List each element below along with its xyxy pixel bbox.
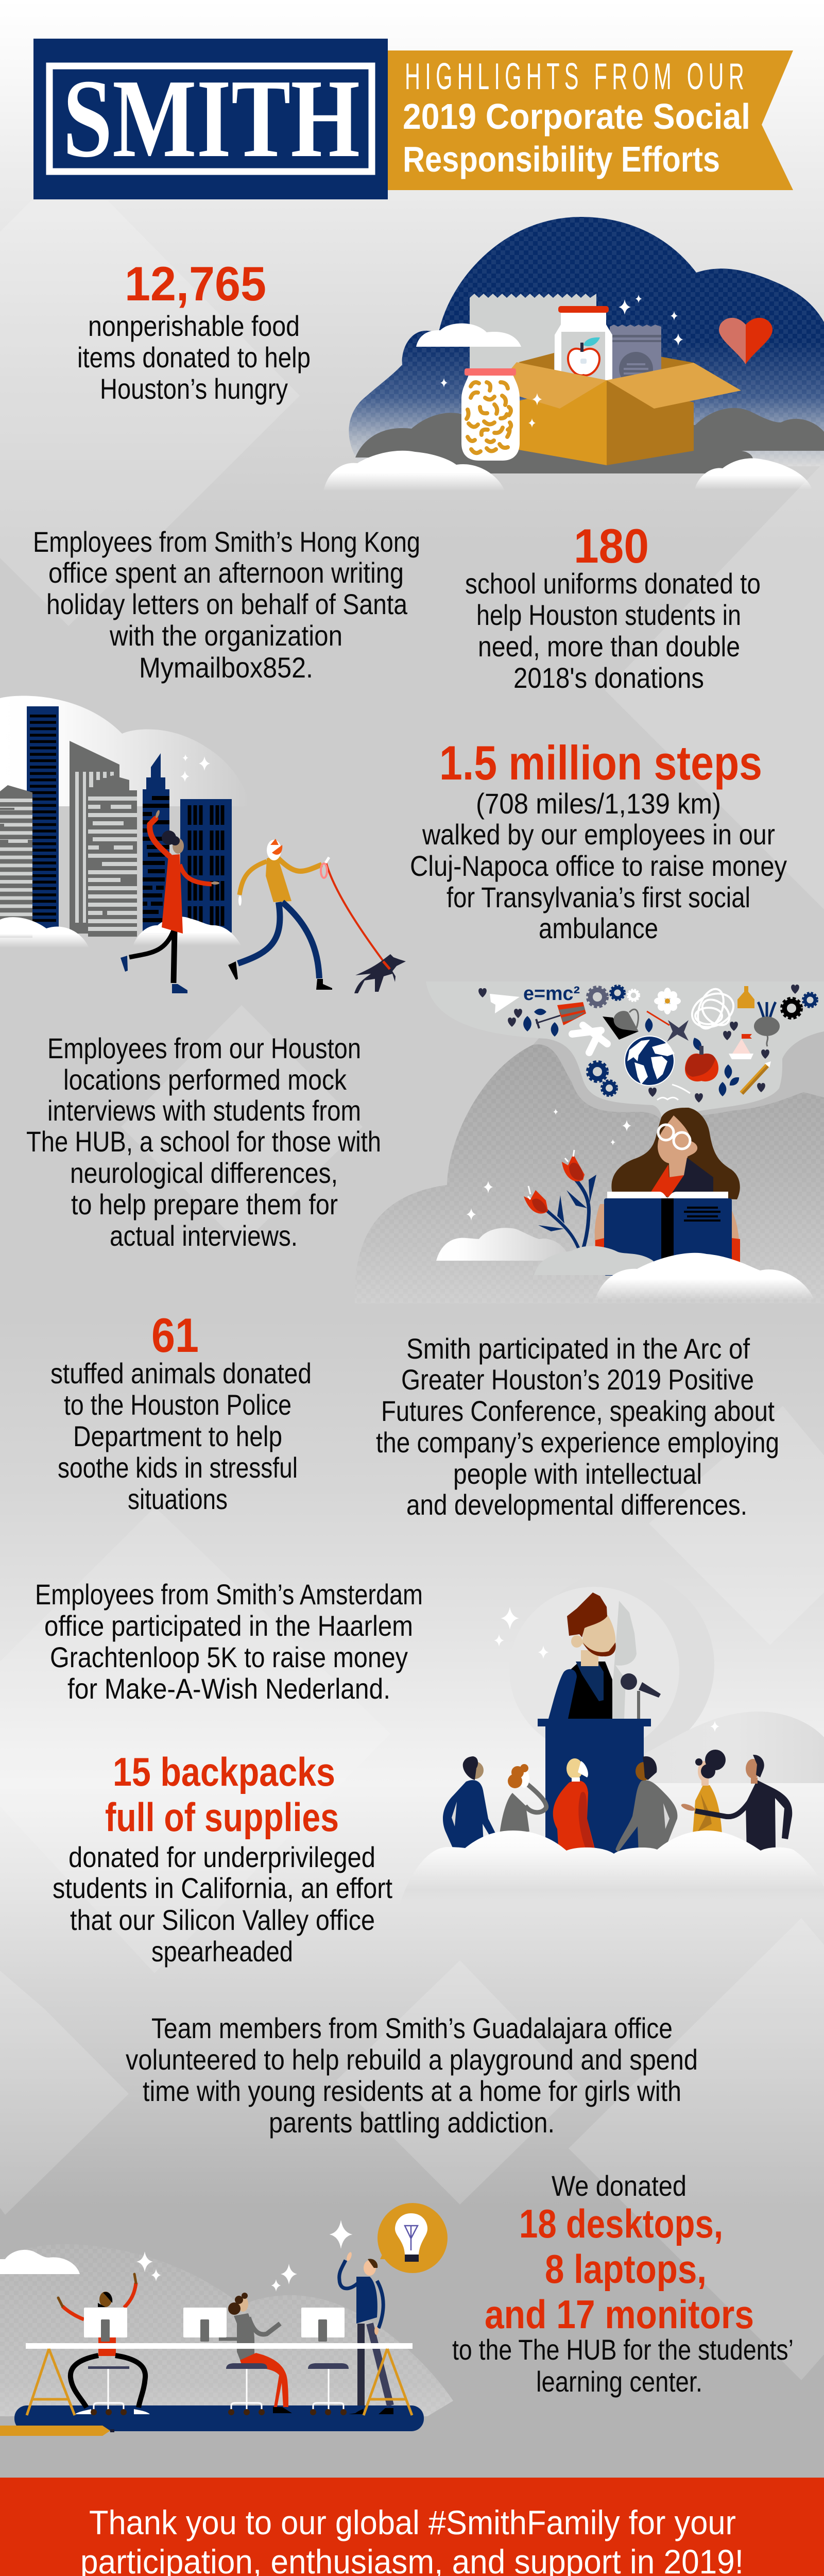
spire tower [143, 753, 169, 934]
seated man (back view) [58, 2274, 150, 2414]
white cloud [0, 2250, 80, 2274]
stat: 12,765 food items: 12,765 [125, 257, 266, 311]
middle grey towers [70, 741, 137, 937]
text: Guadalajara playground [126, 2012, 698, 2139]
monitors [84, 2308, 345, 2342]
stat: 15 backpacks: spearheaded [151, 1935, 293, 1968]
stat: 180 uniforms: 2018's donations [513, 662, 704, 694]
stat: 12,765 food items [77, 257, 311, 405]
stat: 15 backpacks: donated for underprivileged [68, 1841, 375, 1873]
text: Arc of Greater Houston: Greater Houston’s 2019 Positive [401, 1363, 754, 1396]
white cloud [416, 324, 521, 347]
text: Arc of Greater Houston: people with intellectual [453, 1458, 702, 1490]
seated woman [219, 2293, 292, 2413]
stat: computers donated [452, 2170, 794, 2398]
stat: 180 uniforms: school uniforms donated to [465, 567, 761, 600]
text: mock interviews: to help prepare them for [71, 1188, 338, 1221]
stat: 1.5 million steps: (708 miles/1,139 km) [476, 787, 721, 820]
person: red coat [553, 1758, 596, 1855]
panel: thank you banner: Thank you to our global #SmithFamily for your [89, 2503, 736, 2541]
stat: 61 stuffed animals: stuffed animals donated [50, 1357, 312, 1389]
woman reader [595, 1108, 740, 1276]
stat: 15 backpacks: students in California, an effort [53, 1872, 392, 1904]
box back flaps [519, 353, 694, 381]
halftone hill [355, 1040, 824, 1303]
lightbulb bubble [377, 2203, 448, 2273]
speaker shadow [610, 1601, 637, 1719]
cardboard box [494, 362, 741, 465]
stat: 61 stuffed animals: situations [128, 1483, 228, 1515]
stat: 1.5 million steps: 1.5 million steps [439, 736, 762, 790]
text: mock interviews: actual interviews. [110, 1219, 298, 1252]
dog [354, 954, 406, 993]
text: Guadalajara playground: parents battling addiction. [269, 2106, 555, 2139]
stat: computers donated: learning center. [536, 2365, 702, 2398]
halftone hills [0, 2244, 453, 2416]
stat: 180 uniforms: help Houston students in [476, 599, 741, 631]
stat: 61 stuffed animals: 61 [151, 1308, 199, 1362]
text: mock interviews: Employees from our Houston [47, 1032, 361, 1064]
text: Hong Kong holiday letters [33, 526, 420, 684]
stat: 61 stuffed animals: to the Houston Police [64, 1388, 291, 1421]
stat: 15 backpacks [53, 1749, 392, 1968]
text: Amsterdam 5K: for Make-A-Wish Nederland. [67, 1672, 390, 1705]
logo: SMITH [63, 57, 360, 181]
milk bottle [555, 306, 612, 384]
sparkles [180, 754, 210, 782]
illustration: food donation box [323, 217, 824, 491]
paper plane [490, 994, 520, 1013]
stat: 180 uniforms [465, 519, 761, 694]
stat: 61 stuffed animals: Department to help [73, 1420, 282, 1452]
dark cloud [355, 408, 824, 473]
stat: 15 backpacks: that our Silicon Valley office [70, 1904, 375, 1936]
gears [588, 986, 817, 1096]
stat: 12,765 food items: items donated to help [77, 341, 311, 374]
pencil [741, 1061, 771, 1093]
illustration: woman reading with thought bubble [355, 981, 824, 1303]
illustration: computer desk team [0, 2203, 453, 2436]
right navy tower [180, 799, 232, 933]
apple [685, 1046, 718, 1081]
person: grey with phone [500, 1764, 546, 1834]
heart [719, 318, 772, 364]
thought bubble [533, 1030, 824, 1123]
man walking with dog [228, 839, 406, 993]
stat: 15 backpacks: 15 backpacks [113, 1749, 335, 1794]
text: Hong Kong holiday letters: with the organization [109, 619, 342, 652]
text: Guadalajara playground: time with young residents at a home for girls with [143, 2075, 681, 2107]
text: Amsterdam 5K: Employees from Smith’s Amsterdam [35, 1578, 423, 1611]
kettle [603, 1009, 639, 1040]
pinwheel [647, 1011, 689, 1042]
umbrella [536, 1002, 586, 1028]
white bone shape [572, 1025, 607, 1053]
stat: 12,765 food items: Houston’s hungry [100, 372, 288, 405]
podium [538, 1719, 651, 1854]
logo [33, 39, 388, 199]
text: Guadalajara playground: Team members from Smith’s Guadalajara office [151, 2012, 673, 2044]
text: mock interviews: locations performed mock [63, 1063, 347, 1096]
text: Hong Kong holiday letters: Employees from Smith’s Hong Kong [33, 526, 420, 558]
text: Hong Kong holiday letters: Mymailbox852. [139, 651, 313, 684]
daisy [654, 988, 681, 1014]
audience [443, 1750, 792, 1855]
standing man [339, 2251, 393, 2414]
stat: computers donated: 18 desktops, [519, 2201, 723, 2246]
flowers [524, 1150, 596, 1253]
clouds at city base [0, 917, 242, 948]
panel: thank you banner [0, 2478, 824, 2576]
stat: 61 stuffed animals: soothe kids in stressful [58, 1451, 298, 1484]
microphone [621, 1673, 661, 1719]
title ribbon: Responsibility Efforts [403, 139, 720, 179]
paper bag [470, 294, 596, 392]
stools [88, 2363, 349, 2415]
navy floor [14, 2405, 424, 2431]
text: Guadalajara playground: volunteered to help rebuild a playground and spend [126, 2043, 698, 2076]
text: Arc of Greater Houston: Smith participated in the Arc of [406, 1332, 750, 1365]
speaker [548, 1592, 616, 1719]
person: navy jacket [443, 1756, 496, 1855]
book [607, 1192, 728, 1200]
text: Hong Kong holiday letters: holiday letters on behalf of Santa [46, 588, 408, 620]
arms [595, 1204, 740, 1262]
stat: 1.5 million steps: for Transylvania’s first social [447, 881, 750, 913]
text: Amsterdam 5K: Grachtenloop 5K to raise money [50, 1641, 408, 1673]
sparkles [494, 1607, 719, 1732]
title ribbon: 2019 Corporate Social [403, 96, 750, 137]
gold bottle [737, 986, 754, 1008]
city cloud [0, 696, 250, 806]
stat: computers donated: We donated [552, 2170, 686, 2202]
hearts and leaves [478, 985, 799, 1103]
stat: 1.5 million steps [410, 736, 787, 944]
sparkles [440, 295, 683, 428]
stat: 61 stuffed animals [50, 1308, 312, 1515]
pencil [0, 2426, 114, 2436]
halo circles [509, 1570, 824, 1783]
stat: computers donated: and 17 monitors [485, 2292, 754, 2337]
beet [754, 1002, 780, 1046]
sparkles [136, 2220, 352, 2292]
front cloud [400, 1831, 824, 1905]
globe [625, 1036, 675, 1086]
text: Amsterdam 5K: office participated in the Haarlem [44, 1609, 413, 1642]
person: black top reaching [680, 1755, 792, 1855]
text: Hong Kong holiday letters: office spent an afternoon writing [48, 556, 404, 589]
stat: 180 uniforms: need, more than double [478, 630, 740, 663]
text: Arc of Greater Houston: and developmental differences. [406, 1488, 747, 1521]
stat: 15 backpacks: full of supplies [105, 1794, 339, 1840]
scribble [686, 986, 739, 1033]
illustration: city walkers [0, 696, 406, 993]
text: mock interviews: neurological differences, [70, 1157, 338, 1189]
formula: e=mc² [523, 983, 580, 1005]
birds [657, 1084, 690, 1100]
text: Arc of Greater Houston [376, 1332, 779, 1521]
person: grey jacket [615, 1756, 677, 1855]
stat: 1.5 million steps: walked by our employees in our [422, 818, 775, 851]
text: mock interviews: interviews with students from [47, 1094, 361, 1127]
person: gold dress [693, 1750, 726, 1834]
text: mock interviews [26, 1032, 381, 1252]
woman walking [121, 809, 219, 993]
title ribbon [388, 50, 793, 190]
text: Amsterdam 5K [35, 1578, 423, 1705]
panel: header [33, 39, 793, 199]
stat: 12,765 food items: nonperishable food [88, 310, 300, 342]
illustration: speaker at podium [400, 1570, 824, 1905]
stat: 180 uniforms: 180 [574, 519, 649, 573]
stat: computers donated: 8 laptops, [545, 2246, 707, 2292]
left grey tower [0, 785, 32, 938]
text: mock interviews: The HUB, a school for those with [26, 1125, 381, 1158]
stat: 1.5 million steps: ambulance [539, 912, 658, 944]
clouds [436, 1228, 814, 1300]
foreground clouds [323, 451, 812, 491]
trestles [27, 2349, 412, 2415]
sparkles [466, 1109, 631, 1221]
tall navy tower [27, 706, 59, 928]
desk top [26, 2343, 413, 2349]
toy boat [729, 1034, 753, 1059]
cashew jar [461, 368, 520, 461]
grey packet [610, 325, 661, 392]
